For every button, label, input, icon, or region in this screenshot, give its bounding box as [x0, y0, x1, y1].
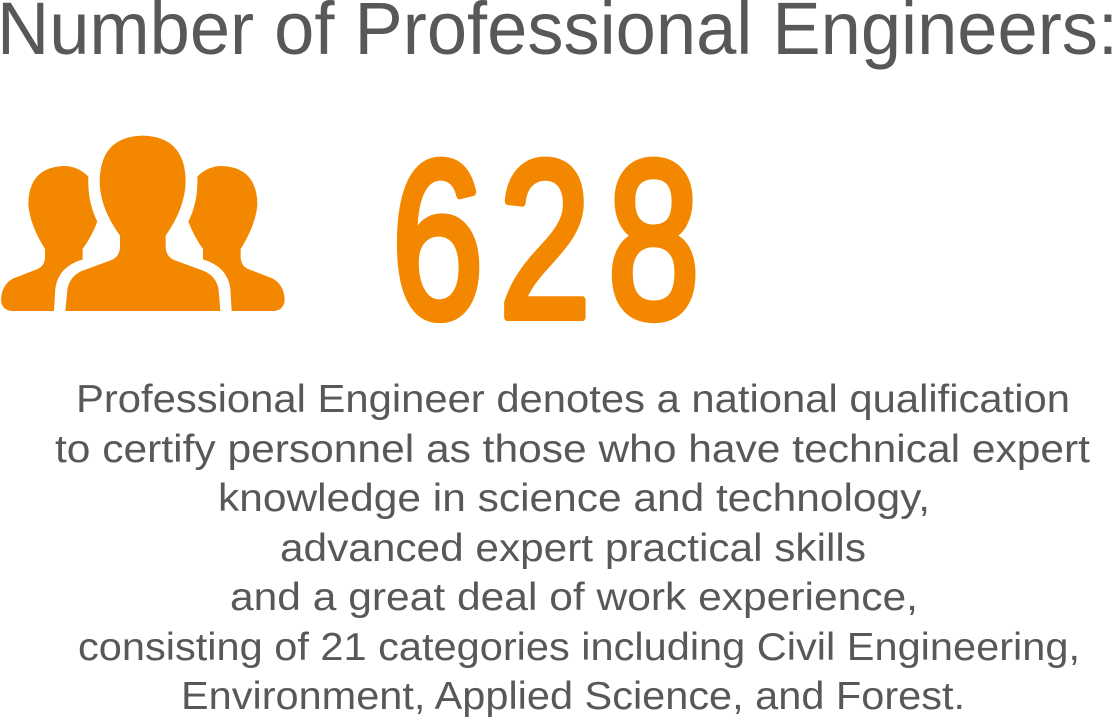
description text block: Professional Engineer denotes a national qualification [76, 378, 1070, 421]
description text block: to certify personnel as those who have technical expert [55, 428, 1090, 471]
description text block: and a great deal of work experience, [230, 576, 918, 619]
description text block: knowledge in science and technology, [218, 477, 930, 520]
description text block: advanced expert practical skills [280, 527, 866, 570]
big number: 628: 628 [391, 115, 700, 365]
icon: group of three people [1, 136, 285, 311]
description text block: consisting of 21 categories including Civil Engineering, [78, 626, 1080, 669]
description text block: Environment, Applied Science, and Forest. [181, 675, 965, 718]
description text block [55, 378, 1090, 718]
